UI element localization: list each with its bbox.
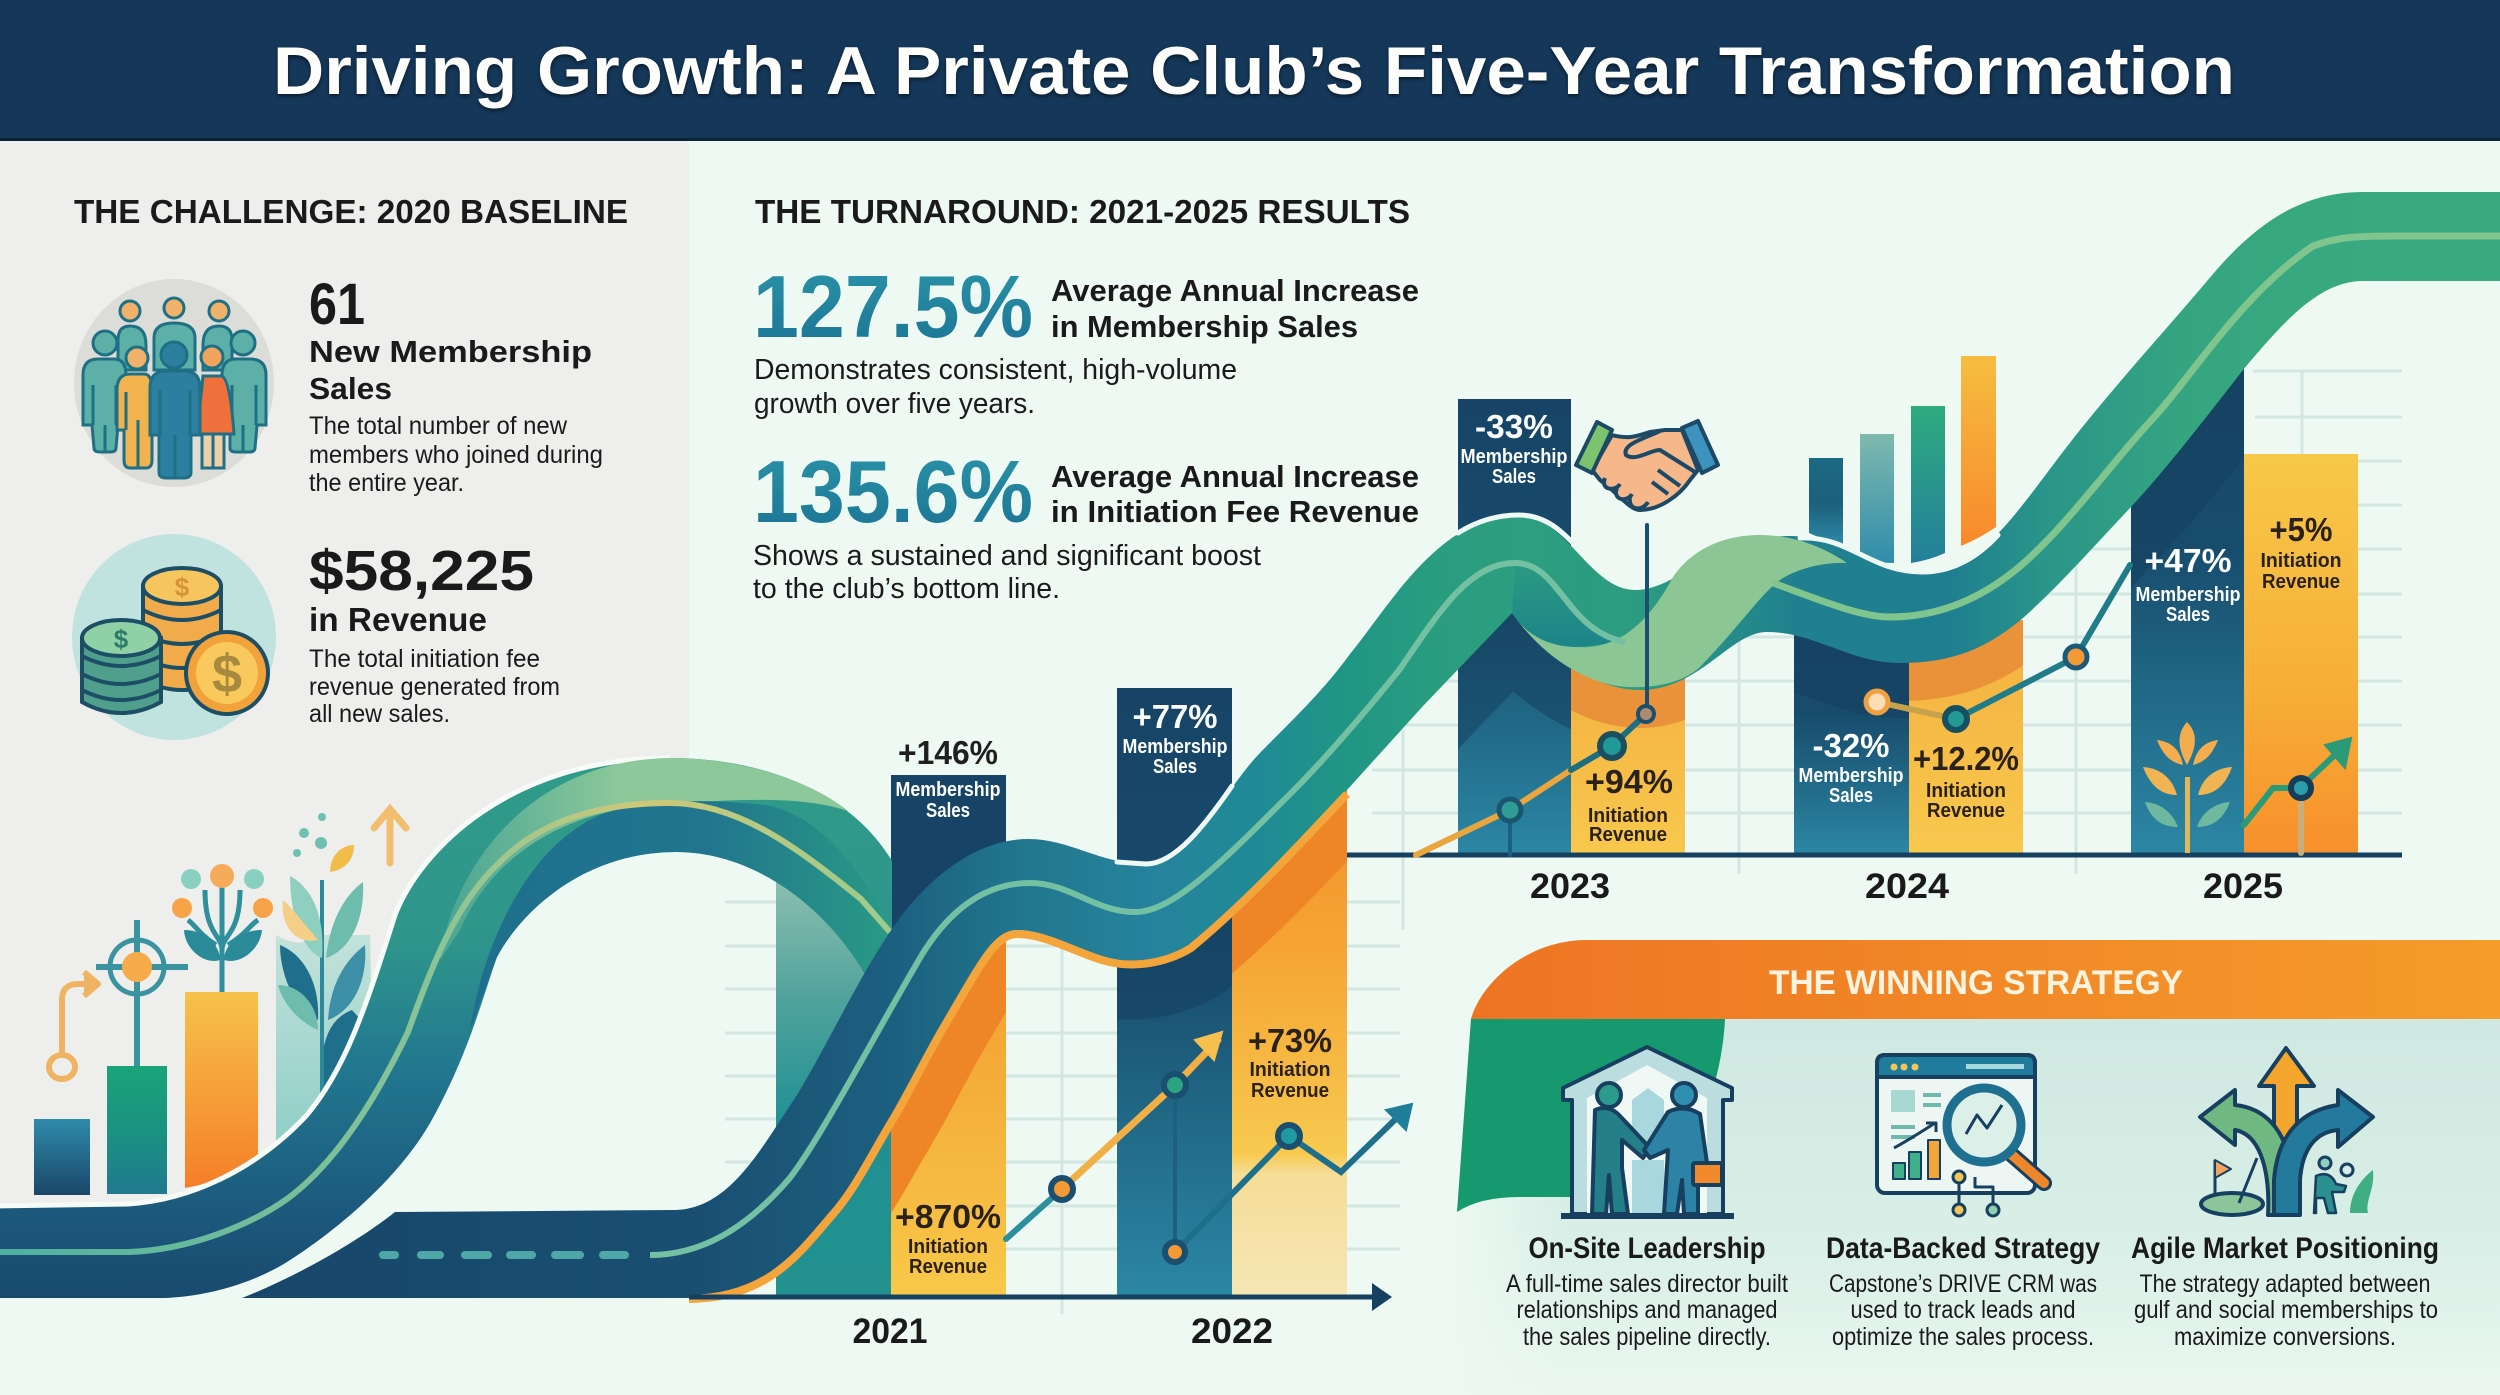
description: fee revenue: Shows a sustained and significant boost: [753, 540, 1261, 572]
2022 membership bar: [1117, 688, 1232, 1295]
labels: 2024 membership: [1798, 727, 1904, 807]
labels: 2021 initiation: [895, 1198, 1001, 1278]
icon bar 1: [34, 1119, 90, 1195]
bars: 2025: [2131, 300, 2358, 853]
challenge heading: THE CHALLENGE: 2020 BASELINE: [74, 193, 628, 230]
line chart 2023: [1416, 525, 1654, 855]
ribbon: main growth path: [242, 192, 2500, 1299]
icon: data dashboard: [1877, 1055, 2044, 1216]
2025 initiation revenue bar: [2244, 454, 2358, 853]
panel: challenge background: [0, 141, 689, 1250]
labels: 2021 membership: [896, 734, 1000, 822]
labels: 2025 membership: Membership: [2136, 584, 2240, 606]
line chart 2024: [1866, 565, 2130, 730]
labels: 2022 initiation: Initiation: [1250, 1059, 1330, 1081]
stat label: initiation fee increase: in Initiation Fee Revenue: [1051, 494, 1419, 529]
labels: 2023 membership: Membership: [1460, 446, 1568, 468]
stat label: new membership sales: [309, 334, 592, 406]
2021 membership teal bar: [776, 878, 891, 1295]
description: membership growth: [754, 354, 1237, 420]
labels: 2022 initiation: +73%: [1248, 1022, 1332, 1059]
strategy background: [1416, 1019, 2500, 1395]
labels: 2023 membership: Sales: [1492, 466, 1536, 488]
stat label: new membership sales: New Membership: [309, 334, 592, 369]
panel: the winning strategy: [1415, 940, 2500, 1395]
description: revenue: [309, 645, 560, 728]
2024 initiation revenue bar: [1909, 620, 2023, 855]
labels: 2025 initiation: Revenue: [2262, 571, 2340, 593]
icon: coin stacks: [72, 534, 276, 740]
turnaround heading: THE TURNAROUND: 2021-2025 RESULTS: [755, 193, 1410, 230]
description: membership growth: growth over five years.: [754, 388, 1035, 420]
strategy: on-site leadership: On-Site Leadership: [1528, 1232, 1766, 1265]
2021 membership label box: [891, 775, 1006, 932]
centre stripe: [650, 563, 1625, 1255]
2025 membership bar: [2131, 300, 2244, 853]
strategy: data-backed strategy: optimize the sales process.: [1832, 1323, 2094, 1351]
icon: plant in 2025 bar: [2143, 722, 2232, 853]
description: revenue: The total initiation fee: [309, 645, 540, 673]
icon: on-site leadership: [1561, 1047, 1734, 1216]
description: new membership sales: the entire year.: [309, 469, 464, 497]
icon: handshake: [1576, 421, 1718, 510]
labels: 2021 membership: +146%: [898, 734, 998, 771]
labels: 2023 membership: -33%: [1475, 408, 1553, 445]
bars: 2022: [1117, 688, 1347, 1295]
labels: 2024 initiation: [1913, 740, 2019, 822]
axis lower with arrow: [689, 1283, 1392, 1311]
2022 initiation revenue bar: [1232, 790, 1347, 1295]
description: fee revenue: to the club’s bottom line.: [753, 573, 1060, 605]
stat: 135.6%: 135.6%: [753, 442, 1033, 541]
year labels: 2022: [1191, 1312, 1273, 1351]
stat label: membership sales increase: in Membership Sales: [1051, 309, 1358, 344]
description: new membership sales: [309, 412, 603, 497]
stat label: in revenue: in Revenue: [309, 601, 487, 638]
labels: 2025 initiation: +5%: [2270, 511, 2332, 548]
bars: 2024: [1794, 600, 2023, 855]
2021 initiation revenue bar: [891, 932, 1006, 1295]
strategy: data-backed strategy: Data-Backed Strategy: [1826, 1232, 2100, 1265]
panel: the challenge 2020 baseline: [72, 193, 628, 740]
orange edge line: [689, 794, 1347, 1299]
teal fold: [1512, 563, 1625, 647]
labels: 2025 membership: +47%: [2144, 542, 2232, 579]
axis upper: [1347, 852, 2402, 858]
labels: 2025 initiation: Initiation: [2260, 550, 2342, 572]
labels: 2021 initiation: Initiation: [908, 1236, 988, 1258]
2023 initiation revenue bar: [1571, 660, 1685, 855]
strategy: agile market positioning: gulf and social memberships to: [2134, 1296, 2438, 1324]
stat: 61: 61: [309, 272, 365, 337]
icon: coin stacks: $: [212, 644, 242, 704]
icon: path arrow with ring: [49, 972, 98, 1079]
labels: 2021 initiation: +870%: [895, 1198, 1001, 1235]
light green swoosh: [1512, 535, 1847, 687]
centre stripe right: [1773, 236, 2500, 617]
icon bar 3: [185, 992, 258, 1188]
labels: 2022 initiation: [1248, 1022, 1332, 1102]
title: Driving Growth: A Private Club’s Five-Year Transformation: [273, 33, 2235, 109]
header: [0, 0, 2500, 141]
labels: 2023 initiation: Revenue: [1589, 824, 1667, 846]
ribbon: first arch: [0, 758, 892, 1298]
labels: 2023 initiation: Initiation: [1588, 805, 1668, 827]
icon: coin stacks: $: [175, 572, 190, 602]
labels: 2023 membership: [1460, 408, 1568, 488]
strategy: data-backed strategy: Capstone’s DRIVE CRM was: [1829, 1270, 2097, 1298]
labels: 2022 membership: Sales: [1153, 756, 1197, 778]
year labels: 2021: [852, 1312, 928, 1351]
soft left fade of strategy background: [1415, 1130, 1565, 1395]
2023 membership bar: [1458, 399, 1571, 855]
strategy: on-site leadership: the sales pipeline directly.: [1523, 1323, 1771, 1351]
description: revenue: revenue generated from: [309, 673, 560, 701]
stat: 127.5%: 127.5%: [753, 257, 1033, 356]
labels: 2025 membership: [2136, 542, 2240, 626]
strategy: agile market positioning: [2131, 1232, 2439, 1351]
labels: 2025 membership: Sales: [2166, 604, 2210, 626]
icon: people group: [74, 279, 274, 487]
labels: 2024 membership: Sales: [1829, 785, 1873, 807]
2024 membership bar: [1794, 600, 1909, 855]
banner title: THE WINNING STRATEGY: [1769, 964, 2183, 1002]
description: revenue: all new sales.: [309, 700, 450, 728]
labels: 2022 initiation: Revenue: [1251, 1080, 1329, 1102]
strategy: agile market positioning: maximize conversions.: [2174, 1323, 2396, 1351]
year labels: 2023: [1530, 867, 1610, 906]
labels: 2022 membership: [1122, 698, 1228, 778]
labels: 2024 initiation: Revenue: [1927, 800, 2005, 822]
strategy: data-backed strategy: used to track leads and: [1850, 1296, 2076, 1324]
year labels: 2025: [2203, 867, 2283, 906]
stat label: initiation fee increase: [1051, 459, 1419, 529]
description: fee revenue: [753, 540, 1261, 605]
highlight edges: [1117, 515, 1998, 864]
orange banner: [1471, 940, 2500, 1019]
labels: 2023 initiation: +94%: [1585, 763, 1673, 800]
road dashes: [383, 1251, 625, 1259]
bars: 2023: [1458, 399, 1685, 855]
year labels: 2024: [1865, 867, 1950, 906]
strategy: agile market positioning: The strategy adapted between: [2140, 1270, 2430, 1298]
chart grid: [725, 371, 2402, 1314]
labels: 2022 membership: +77%: [1132, 698, 1218, 735]
icon: flower: [172, 864, 273, 992]
stat label: membership sales increase: [1051, 273, 1419, 344]
stat label: membership sales increase: Average Annual Increase: [1051, 273, 1419, 308]
description: new membership sales: members who joined during: [309, 441, 603, 469]
strategy: on-site leadership: relationships and managed: [1516, 1296, 1778, 1324]
shaded bands under ribbon: [689, 370, 2243, 1299]
panel: turnaround results: [753, 193, 1419, 605]
labels: 2021 initiation: Revenue: [909, 1256, 987, 1278]
icon: up arrow: [374, 809, 406, 863]
icon: target: [96, 920, 188, 1066]
mini bar chart above ribbon: [1809, 356, 1996, 563]
labels: 2022 membership: Membership: [1122, 736, 1228, 758]
stat: revenue figure: $58,225: [309, 539, 534, 603]
stat label: new membership sales: Sales: [309, 371, 392, 406]
labels: 2023 initiation: [1585, 763, 1673, 846]
labels: 2024 membership: -32%: [1812, 727, 1890, 764]
icon bar 4 with plant: [276, 845, 372, 1143]
line chart 2021-2022: [1006, 1032, 1412, 1262]
strategy: data-backed strategy: [1826, 1232, 2100, 1351]
icon: agile arrows and golf: [2200, 1048, 2373, 1215]
left growth illustration: [34, 809, 406, 1195]
icon: coin stacks: $: [114, 624, 129, 654]
strategy: on-site leadership: A full-time sales director built: [1506, 1270, 1788, 1298]
labels: 2025 initiation: [2260, 511, 2342, 593]
description: membership growth: Demonstrates consistent, high-volume: [754, 354, 1237, 386]
bars: 2021: [776, 775, 1006, 1295]
year labels: [852, 867, 2283, 1351]
stat label: initiation fee increase: Average Annual Increase: [1051, 459, 1419, 494]
icon: rising dots: [293, 813, 327, 857]
labels: 2021 membership: Sales: [926, 800, 970, 822]
description: new membership sales: The total number of new: [309, 412, 568, 440]
strategy: on-site leadership: [1506, 1232, 1788, 1351]
labels: 2024 initiation: Initiation: [1926, 780, 2006, 802]
icon bar 2: [107, 1066, 167, 1194]
line chart 2025 with arrow: [2244, 738, 2351, 853]
labels: 2021 membership: Membership: [896, 779, 1000, 801]
labels: 2024 initiation: +12.2%: [1913, 740, 2019, 777]
green corner shape: [1457, 1019, 1725, 1212]
strategy: agile market positioning: Agile Market Positioning: [2131, 1232, 2439, 1265]
labels: 2024 membership: Membership: [1798, 765, 1904, 787]
